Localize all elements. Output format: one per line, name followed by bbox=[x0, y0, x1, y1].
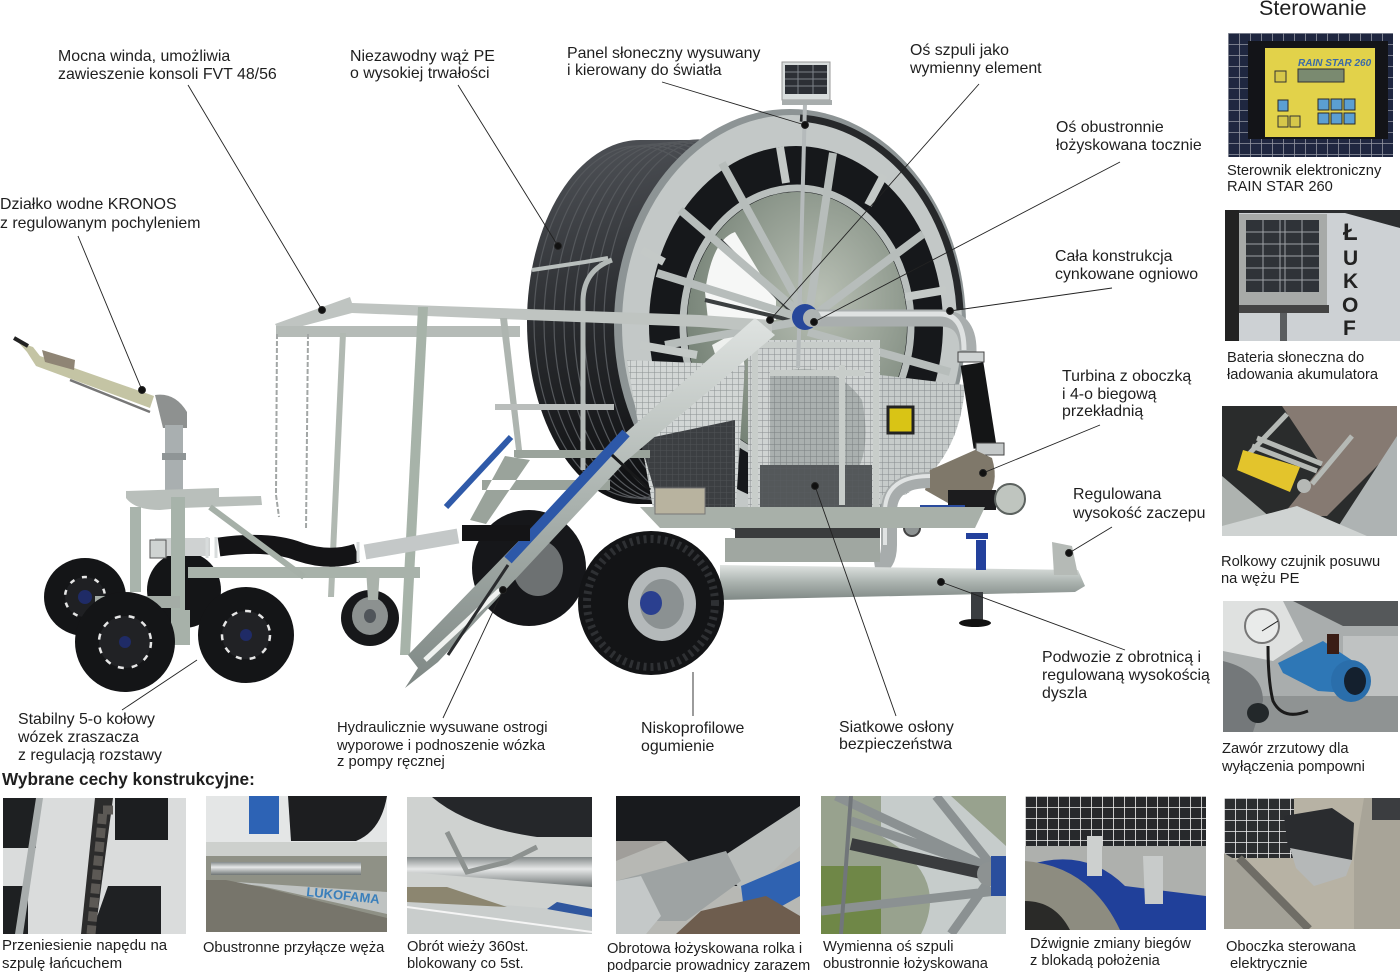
label: solar panel: i kierowany do światła bbox=[567, 62, 722, 79]
photo: gear levers bbox=[1025, 796, 1206, 930]
caption: solar battery: ładowania akumulatora bbox=[1227, 367, 1379, 383]
main frame and outrigger bbox=[275, 297, 775, 688]
solar panel on mast bbox=[782, 62, 832, 368]
caption: hose connection: Obustronne przyłącze węża bbox=[203, 940, 385, 956]
photo: RAIN STAR controller: RAIN STAR 260 bbox=[1298, 58, 1372, 69]
caption: electric valve: elektrycznie bbox=[1230, 956, 1308, 972]
rear wheel bbox=[472, 510, 586, 626]
label: chassis: Podwozie z obrotnicą i bbox=[1042, 649, 1201, 666]
caption: relief valve: wyłączenia pompowni bbox=[1221, 759, 1365, 775]
water pipe and flexible hose bbox=[792, 304, 1004, 455]
caption: chain drive: Przeniesienie napędu na bbox=[2, 937, 167, 954]
turbine and gearbox bbox=[875, 450, 1025, 568]
caption: tower rotation: Obrót wieży 360st. bbox=[407, 939, 529, 955]
label: bearing axle: łożyskowana tocznie bbox=[1056, 137, 1202, 154]
mesh guards bbox=[627, 340, 965, 520]
label: galvanized: Cała konstrukcja bbox=[1055, 248, 1172, 265]
label: winch: Mocna winda, umożliwia bbox=[58, 48, 230, 65]
hose drum bbox=[527, 140, 812, 504]
label: hitch: Regulowana bbox=[1073, 486, 1161, 503]
label: solar panel: Panel słoneczny wysuwany bbox=[567, 45, 760, 62]
drawbar chassis with jack bbox=[640, 488, 1085, 627]
five wheel cart front wheels bbox=[75, 587, 294, 692]
photo: electric valve bbox=[1224, 798, 1400, 929]
label: PE hose: o wysokiej trwałości bbox=[350, 65, 490, 82]
caption: electric valve: Oboczka sterowana bbox=[1226, 939, 1356, 955]
photo: solar battery: U bbox=[1343, 247, 1358, 270]
photo: roller sensor bbox=[1222, 406, 1397, 536]
caption: solar battery: Bateria słoneczna do bbox=[1227, 350, 1364, 366]
photo: RAIN STAR controller bbox=[1228, 33, 1393, 157]
label: turbine: przekładnią bbox=[1062, 403, 1143, 420]
caption: relief valve: Zawór zrzutowy dla bbox=[1222, 741, 1349, 757]
label: cart: z regulacją rozstawy bbox=[18, 747, 162, 764]
photo: solar battery: K bbox=[1343, 270, 1358, 293]
photo: chain drive bbox=[3, 798, 186, 934]
label: hitch: wysokość zaczepu bbox=[1072, 505, 1205, 522]
label: tyres: Niskoprofilowe bbox=[641, 720, 744, 737]
chains bbox=[276, 334, 308, 530]
label: turbine: Turbina z oboczką bbox=[1062, 368, 1191, 385]
photo: replaceable spool axle bbox=[821, 796, 1006, 934]
photo: solar battery: F bbox=[1343, 317, 1356, 340]
sprinkler cart frame bbox=[95, 488, 420, 637]
label: winch: zawieszenie konsoli FVT 48/56 bbox=[58, 66, 277, 83]
label: chassis: regulowaną wysokością bbox=[1042, 667, 1210, 684]
label: outriggers: Hydraulicznie wysuwane ostrogi bbox=[337, 720, 548, 736]
label: gun: z regulowanym pochyleniem bbox=[0, 215, 200, 232]
label: outriggers: z pompy ręcznej bbox=[337, 754, 445, 770]
label: tyres: ogumienie bbox=[641, 738, 714, 755]
label: cart: wózek zraszacza bbox=[17, 729, 139, 746]
caption: controller: RAIN STAR 260 bbox=[1227, 179, 1333, 195]
sprinkler gun KRONOS bbox=[14, 338, 187, 490]
label: guards: bezpieczeństwa bbox=[839, 736, 952, 753]
caption: gear levers: z blokadą położenia bbox=[1030, 953, 1161, 969]
photo: double-sided hose connection: LUKOFAMA bbox=[306, 884, 381, 907]
reel front flange bbox=[614, 109, 966, 541]
label: chassis: dyszla bbox=[1042, 685, 1087, 702]
label: gun: Działko wodne KRONOS bbox=[0, 196, 177, 213]
heading: Wybrane cechy konstrukcyjne: Wybrane cechy konstrukcyjne: bbox=[2, 769, 255, 789]
caption: roller sensor: Rolkowy czujnik posuwu bbox=[1221, 554, 1380, 570]
caption: roller sensor: na wężu PE bbox=[1221, 571, 1300, 587]
label: outriggers: wyporowe i podnoszenie wózka bbox=[336, 738, 546, 754]
main low profile wheel bbox=[578, 531, 724, 675]
photo: solar battery bbox=[1225, 210, 1400, 341]
photo: solar battery: Ł bbox=[1343, 219, 1358, 246]
caption: spool axle: obustronnie łożyskowana bbox=[823, 956, 989, 972]
label: bearing axle: Oś obustronnie bbox=[1056, 119, 1164, 136]
machine: hose reel irrigator bbox=[14, 62, 1085, 692]
label: reel axle: Oś szpuli jako bbox=[910, 42, 1009, 59]
label: reel axle: wymienny element bbox=[909, 60, 1042, 77]
suction hose to cart bbox=[155, 533, 530, 562]
label: galvanized: cynkowane ogniowo bbox=[1055, 266, 1198, 283]
caption: tower rotation: blokowany co 5st. bbox=[407, 956, 524, 972]
photo: tower rotation bbox=[407, 797, 592, 934]
caption: chain drive: szpulę łańcuchem bbox=[2, 955, 122, 972]
photo: double-sided hose connection bbox=[206, 796, 387, 932]
label: guards: Siatkowe osłony bbox=[839, 719, 954, 736]
five wheel cart rear wheels bbox=[44, 552, 221, 636]
photo: solar battery: O bbox=[1342, 294, 1358, 317]
caption: bearing roller: Obrotowa łożyskowana rolka i bbox=[607, 941, 802, 957]
caption: controller: Sterownik elektroniczny bbox=[1227, 163, 1381, 179]
photo: bearing roller bbox=[616, 796, 800, 934]
caption: spool axle: Wymienna oś szpuli bbox=[823, 939, 953, 955]
caption: gear levers: Dźwignie zmiany biegów bbox=[1030, 936, 1191, 952]
photo: relief valve bbox=[1223, 601, 1398, 732]
leader lines with dots bbox=[78, 82, 1125, 718]
small support wheel bbox=[341, 568, 399, 646]
label: PE hose: Niezawodny wąż PE bbox=[350, 48, 495, 65]
label: turbine: i 4-o biegową bbox=[1062, 386, 1157, 403]
label: cart: Stabilny 5-o kołowy bbox=[18, 711, 155, 728]
